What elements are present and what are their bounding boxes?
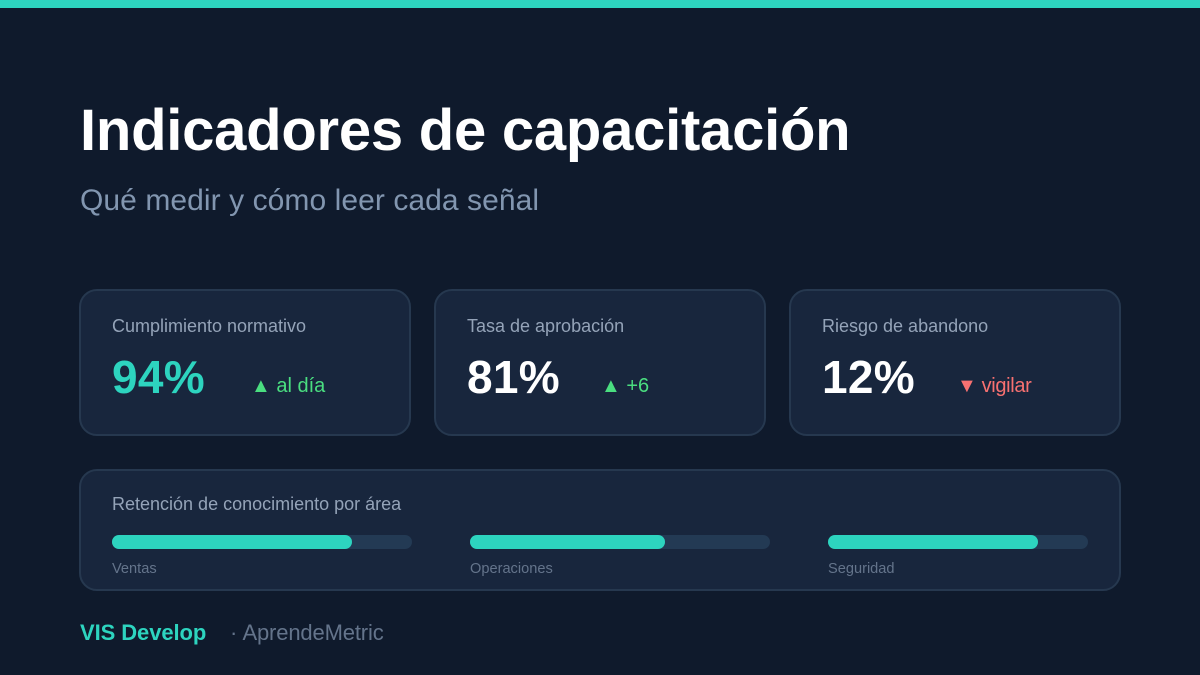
metric value: 12% xyxy=(822,351,915,403)
top accent bar xyxy=(0,0,1200,8)
card label: Cumplimiento normativo xyxy=(112,316,306,336)
footer source: · AprendeMetric xyxy=(230,620,384,645)
bar: operaciones xyxy=(470,535,770,549)
bar label: ventas: Ventas xyxy=(112,561,157,577)
panel: cumplimiento normativo xyxy=(79,289,411,436)
title: Indicadores de capacitación xyxy=(80,98,850,163)
bar label: operaciones: Operaciones xyxy=(470,561,553,577)
panel: riesgo de abandono xyxy=(789,289,1121,436)
bar label: seguridad: Seguridad xyxy=(828,561,895,577)
subtitle: Qué medir y cómo leer cada señal xyxy=(80,184,539,217)
metric value: 81% xyxy=(467,351,560,403)
metric value: 94% xyxy=(112,351,205,403)
panel heading: Retención de conocimiento por área xyxy=(112,494,401,514)
bar: seguridad xyxy=(828,535,1088,549)
trend indicator: ▲ +6 xyxy=(601,375,649,397)
card label: Tasa de aprobación xyxy=(467,316,624,336)
bar: ventas xyxy=(112,535,412,549)
footer brand: VIS Develop xyxy=(80,620,206,645)
trend indicator: ▲ al día xyxy=(251,375,325,397)
panel: retención de conocimiento xyxy=(79,469,1121,591)
card label: Riesgo de abandono xyxy=(822,316,988,336)
panel: tasa de aprobación xyxy=(434,289,766,436)
trend indicator: ▼ vigilar xyxy=(957,375,1031,397)
